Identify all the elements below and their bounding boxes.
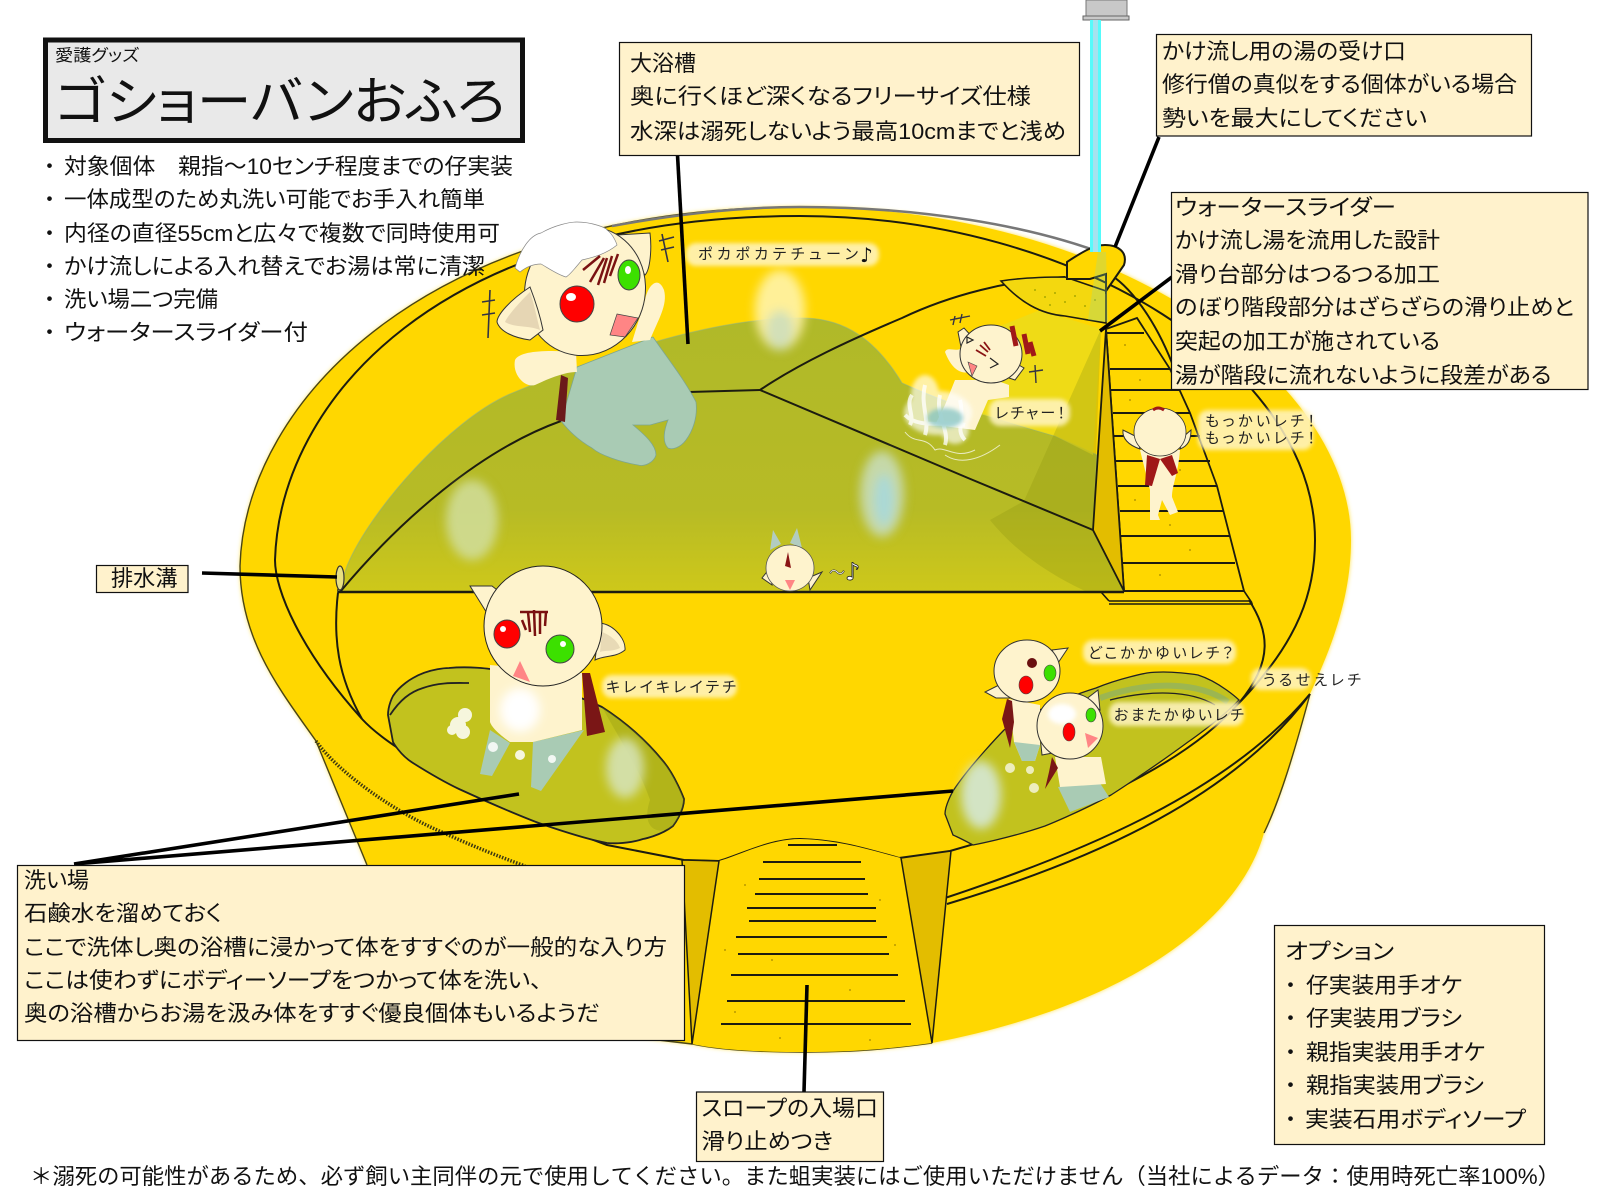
callout: inlet: かけ流し用の湯の受け口	[1162, 39, 1406, 64]
slide head fan	[1001, 277, 1106, 323]
feature list: 対象個体 親指～10センチ程度までの仔実装	[64, 154, 513, 179]
callout: options: 親指実装用手オケ	[1306, 1040, 1485, 1065]
dark wedge on slide	[1024, 329, 1101, 530]
feature list: 内径の直径55cmと広々で複数で同時使用可	[64, 221, 500, 246]
blobs of steam	[446, 270, 904, 560]
leader line: drain	[202, 573, 337, 577]
feature list: 一体成型のため丸洗い可能でお手入れ簡単	[64, 187, 485, 212]
callout: slope: スロープの入場口	[702, 1096, 878, 1121]
character: washed right basin	[1005, 690, 1109, 812]
callout: options: ・	[1285, 1073, 1296, 1098]
character: standing right basin	[985, 640, 1068, 761]
callout: water slider: 滑り台部分はつるつる加工	[1175, 262, 1440, 287]
callout: options: 仔実装用ブラシ	[1306, 1006, 1462, 1031]
callout: inlet: 修行僧の真似をする個体がいる場合	[1162, 72, 1517, 97]
drain	[336, 566, 344, 590]
bubble: もっかいレチ: もっかいレチ！	[1205, 430, 1315, 447]
callout: water slider: のぼり階段部分はざらざらの滑り止めと	[1175, 295, 1574, 320]
callout: main bath	[620, 42, 1080, 156]
character: climbing stairs	[1123, 408, 1191, 520]
feature list: かけ流しによる入れ替えでお湯は常に清潔	[64, 254, 485, 279]
bubble: もっかいレチ: もっかいレチ！	[1205, 413, 1315, 430]
callout: drain: 排水溝	[111, 566, 178, 591]
character: sliding	[904, 314, 1043, 460]
callout: wash area: ここで洗体し奥の浴槽に浸かって体をすすぐのが一般的な入り方	[24, 935, 667, 960]
bright wedge below fan	[960, 310, 1101, 455]
bubble: キレイキレイテチ: キレイキレイテチ	[606, 679, 736, 696]
leader line: inlet	[1115, 137, 1159, 247]
front slope	[682, 839, 951, 1052]
tub soft glow	[240, 207, 1351, 1052]
bubble: どこかかゆいレチ: どこかかゆいレチ？	[1088, 645, 1233, 662]
title panel	[46, 40, 522, 140]
title panel: 愛護グッズ	[55, 46, 139, 65]
bubble: ポカポカテチューン	[686, 243, 879, 267]
callout: slope: 滑り止めつき	[702, 1129, 833, 1154]
tap	[1083, 0, 1129, 20]
callout: wash area: ここは使わずにボディーソープをつかって体を洗い、	[24, 968, 542, 993]
water inlet nozzle	[1067, 245, 1125, 291]
callout: main bath: 水深は溺死しないよう最高10cmまでと浅め	[630, 119, 1066, 144]
bubble: うるせえレチ: うるせえレチ	[1263, 672, 1361, 689]
bubble: おまたかゆいレチ	[1109, 702, 1244, 726]
slide side face	[1093, 329, 1124, 591]
basin steam	[606, 738, 1001, 829]
callout: options: 実装石用ボディソープ	[1305, 1107, 1526, 1132]
water stream glow on slide	[1088, 252, 1108, 322]
callout: options: ・	[1285, 973, 1296, 998]
callout: water slider	[1172, 192, 1588, 390]
main bath water	[338, 318, 1124, 592]
callout: main bath: 奥に行くほど深くなるフリーサイズ仕様	[630, 84, 1031, 109]
feature list: ウォータースライダー付	[64, 320, 308, 345]
stairs	[1101, 318, 1253, 604]
music note: ♪	[845, 558, 860, 586]
feature list	[44, 154, 513, 345]
callout: options: ・	[1285, 1006, 1296, 1031]
feature list: ・	[44, 320, 55, 345]
bubble: レチャー: レチャー！	[995, 405, 1065, 422]
feature list: ・	[44, 254, 55, 279]
leader lines: wash areas	[74, 791, 953, 864]
feature list: ・	[44, 287, 55, 312]
feature list: ・	[44, 154, 55, 179]
bubble: ポカポカテチューン: ♪	[860, 243, 873, 267]
callout: water slider: かけ流し湯を流用した設計	[1175, 228, 1440, 253]
callout: main bath: 大浴槽	[630, 51, 696, 76]
footnote: ＊溺死の可能性があるため、必ず飼い主同伴の元で使用してください。また蛆実装にはご使用いただけません（当社によるデータ：使用時死亡率100%）	[30, 1164, 1560, 1189]
feature list: 洗い場二つ完備	[64, 287, 218, 312]
callout: inlet	[1156, 34, 1532, 136]
music note: ～	[829, 565, 845, 582]
left wash basin	[388, 667, 684, 843]
leader line: water slider	[1100, 277, 1172, 331]
bubble: うるせえレチ	[1251, 668, 1361, 690]
callout: drain	[96, 566, 188, 592]
character: bathing top-left	[482, 211, 696, 465]
water stream	[1090, 20, 1101, 252]
leader line: main bath	[678, 155, 688, 344]
tub outer edges	[240, 207, 1310, 1052]
dark water patch	[990, 501, 1124, 591]
callout: slope	[696, 1092, 884, 1162]
feature list: ・	[44, 221, 55, 246]
bathtub illustration	[240, 0, 1351, 1052]
bubble: レチャー	[989, 399, 1070, 426]
callout: options: ・	[1285, 1040, 1296, 1065]
character: small in bath	[762, 528, 822, 591]
callout: options: 親指実装用ブラシ	[1306, 1073, 1484, 1098]
callout: options	[1274, 926, 1544, 1144]
bubble: おまたかゆいレチ: おまたかゆいレチ	[1114, 707, 1244, 724]
callout: water slider: ウォータースライダー	[1175, 195, 1396, 220]
callout: wash area: 奥の浴槽からお湯を汲み体をすすぐ優良個体もいるようだ	[24, 1001, 600, 1026]
title panel: ゴショーバンおふろ	[55, 74, 505, 132]
tub body	[240, 207, 1351, 1052]
callout: options: 仔実装用手オケ	[1306, 973, 1462, 998]
bubble: ポカポカテチューン: ポカポカテチューン	[698, 246, 858, 263]
callout: water slider: 湯が階段に流れないように段差がある	[1175, 363, 1552, 388]
callout: wash area	[18, 866, 684, 1040]
right wash basin	[945, 672, 1239, 845]
callout: wash area: 石鹸水を溜めておく	[24, 901, 222, 926]
callout: wash area: 洗い場	[24, 868, 89, 893]
callout: water slider: 突起の加工が施されている	[1175, 329, 1440, 354]
callout: options: ・	[1285, 1107, 1296, 1132]
bubble: どこかかゆいレチ	[1083, 640, 1236, 664]
rim lines	[275, 207, 1315, 904]
bubble: もっかいレチ	[1198, 410, 1315, 450]
character: washing left basin	[447, 566, 625, 791]
leader line: slope	[804, 985, 807, 1092]
callout: options: オプション	[1285, 939, 1394, 964]
music note	[829, 558, 860, 586]
callout: inlet: 勢いを最大にしてください	[1162, 106, 1427, 131]
bath structure lines	[338, 277, 1124, 592]
feature list: ・	[44, 187, 55, 212]
